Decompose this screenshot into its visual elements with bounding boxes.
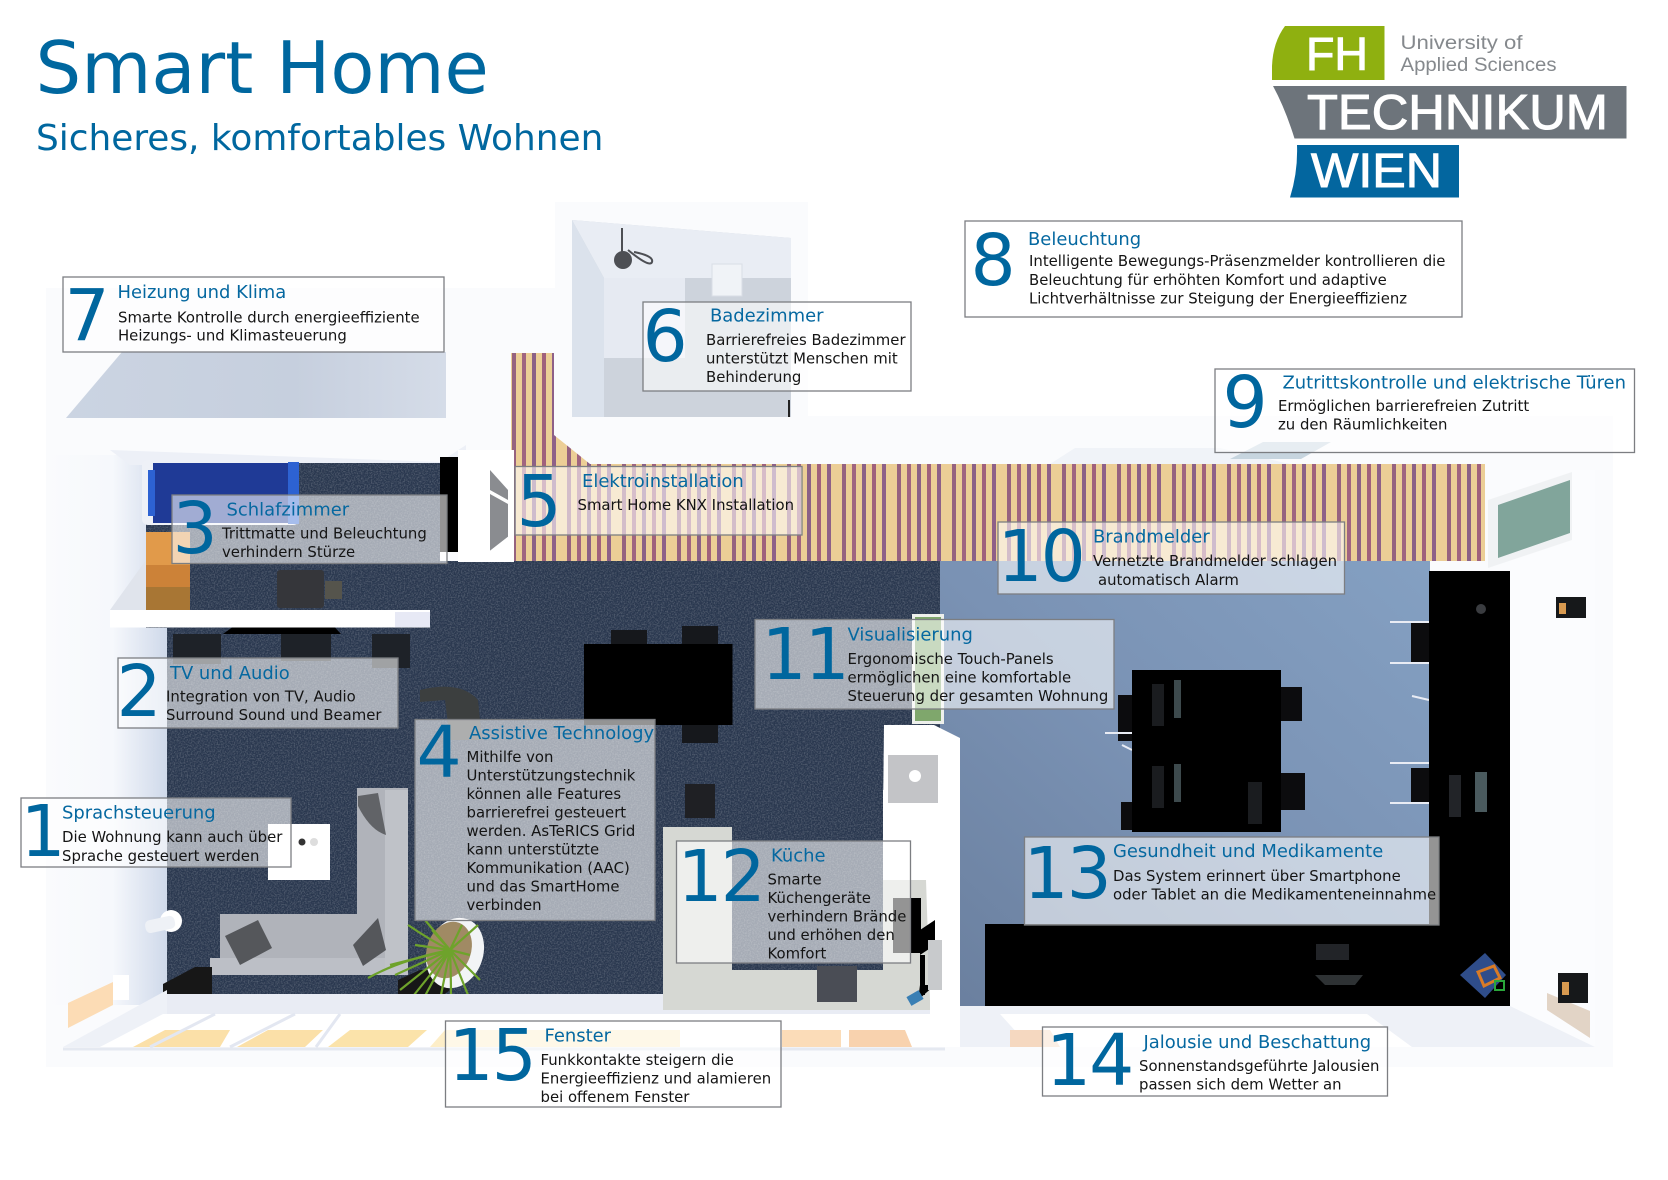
panel 4: Assistive Technology: und das SmartHome (466, 878, 620, 896)
panel 7: Heizung und Klima: Smarte Kontrolle durch energieeffiziente (118, 308, 420, 326)
logo: FH Technikum Wien: Applied Sciences (1400, 55, 1556, 76)
right wall and floor (960, 470, 1595, 1047)
panel 8: Beleuchtung: Intelligente Bewegungs-Präsenzmelder kontrollieren die (1029, 252, 1445, 270)
panel 7: Heizung und Klima: 7 (64, 274, 108, 357)
bathroom (572, 220, 791, 417)
logo: FH Technikum Wien (1272, 26, 1626, 198)
panel 10: Brandmelder: automatisch Alarm (1098, 571, 1239, 589)
kitchen counter (663, 827, 930, 1010)
plant (368, 910, 494, 1040)
panel 6: Badezimmer: Behinderung (706, 368, 801, 386)
office furniture (985, 571, 1510, 1006)
panel 1: Sprachsteuerung: Sprachsteuerung (62, 802, 216, 824)
panel 11: Visualisierung: 11 (762, 613, 848, 696)
panel 15: Fenster: bei offenem Fenster (540, 1088, 690, 1106)
panel 11: Visualisierung (755, 613, 1114, 709)
panel 12: Küche: Smarte (768, 870, 822, 888)
panel 12: Küche: und erhöhen den (768, 926, 895, 944)
panel 4: Assistive Technology: Assistive Technology (469, 723, 655, 744)
panel 13: Gesundheit und Medikamente: Gesundheit und Medikamente (1113, 841, 1383, 862)
left wall glow (46, 455, 167, 1005)
wall lamp (144, 910, 182, 934)
panel 4: Assistive Technology: barrierefrei gesteuert (466, 804, 626, 822)
panel 15: Fenster: 15 (448, 1014, 535, 1097)
panel 6: Badezimmer: unterstützt Menschen mit (706, 350, 898, 368)
panel 12: Küche: 12 (678, 835, 764, 918)
panel 14: Jalousie und Beschattung: Sonnenstandsgeführte Jalousien (1139, 1057, 1379, 1075)
logo: FH Technikum Wien: University of (1400, 33, 1523, 54)
oven unit (888, 755, 938, 803)
panel 11: Visualisierung: ermöglichen eine komfortable (848, 668, 1071, 686)
panel 12: Küche: Küche (771, 846, 826, 866)
panel 5: Elektroinstallation: Elektroinstallation (582, 471, 744, 492)
panel 4: Assistive Technology: werden. AsTeRICS Grid (466, 822, 635, 840)
door 9 (1230, 442, 1331, 459)
carpet (146, 463, 960, 994)
panel 15: Fenster (446, 1014, 781, 1107)
ceiling shade above stripes (1050, 448, 1290, 464)
kitchen wall (883, 725, 960, 1047)
panel 12: Küche: Küchengeräte (768, 889, 871, 907)
right room floor (940, 561, 1430, 1006)
panel 14: Jalousie und Beschattung: Jalousie und Beschattung (1142, 1032, 1371, 1053)
sofa (210, 788, 408, 975)
panel 4: Assistive Technology: Mithilfe von (466, 748, 553, 766)
panel 10: Brandmelder: Brandmelder (1093, 526, 1210, 548)
subtitle: Sicheres, komfortables Wohnen (36, 118, 603, 159)
panel 6: Badezimmer (642, 295, 911, 391)
panel 5: Elektroinstallation (515, 460, 802, 543)
panel 4: Assistive Technology: verbinden (466, 896, 542, 914)
panel 10: Brandmelder: 10 (998, 515, 1084, 598)
bottom floor (63, 975, 945, 1049)
panel 15: Fenster: Funkkontakte steigern die (540, 1051, 734, 1069)
panel 11: Visualisierung: Ergonomische Touch-Panels (848, 650, 1054, 668)
logo: FH Technikum Wien: TECHNIKUM (1307, 86, 1608, 140)
room behind panel 7 (66, 352, 446, 418)
panel 11: Visualisierung: Visualisierung (848, 624, 973, 646)
floor speakers (163, 967, 450, 1013)
panel 7: Heizung und Klima: Heizung und Klima (118, 282, 286, 303)
panel 12: Küche (676, 835, 910, 963)
panel 11: Visualisierung: Steuerung der gesamten Wohnung (848, 687, 1108, 705)
bedroom wall (110, 610, 430, 628)
panel 3: Schlafzimmer: Schlafzimmer (226, 500, 350, 520)
panel 9: Zutrittskontrolle: 9 (1222, 361, 1266, 444)
small stool (685, 784, 715, 818)
panel 12: Küche: verhindern Brände (768, 908, 906, 926)
panel 4: Assistive Technology: 4 (416, 711, 460, 794)
panel 4: Assistive Technology: Kommunikation (AAC) (466, 859, 630, 877)
panel 6: Badezimmer: 6 (642, 295, 686, 378)
panel 10: Brandmelder (998, 515, 1344, 598)
logo: FH Technikum Wien: WIEN (1311, 145, 1442, 198)
panel 4: Assistive Technology: Unterstützungstechnik (466, 766, 636, 784)
desk chair (277, 570, 342, 608)
building footprint (46, 202, 1613, 1067)
panel 14: Jalousie und Beschattung: 14 (1046, 1019, 1132, 1102)
panel 8: Beleuchtung: Beleuchtung für erhöhten Komfort und adaptive (1029, 271, 1387, 289)
panel 7: Heizung und Klima (63, 274, 444, 357)
panel 8: Beleuchtung: 8 (970, 219, 1014, 302)
panel 2: TV und Audio: Surround Sound und Beamer (166, 706, 382, 724)
panel 1: Sprachsteuerung (20, 790, 291, 873)
panel 8: Beleuchtung (965, 219, 1462, 317)
panel 8: Beleuchtung: Beleuchtung (1028, 229, 1141, 250)
bedroom upper wall (110, 445, 466, 465)
panel 13: Gesundheit und Medikamente: oder Tablet an die Medikamenteneinnahme (1113, 886, 1436, 904)
window (1488, 472, 1572, 568)
door frame (440, 450, 514, 562)
panel 9: Zutrittskontrolle: Ermöglichen barrierefreien Zutritt (1278, 397, 1529, 415)
floor plan scene (46, 202, 1613, 1067)
panel 13: Gesundheit und Medikamente: Das System erinnert über Smartphone (1113, 867, 1401, 885)
green wall panel (912, 614, 944, 724)
panel 15: Fenster: Energieeffizienz und alamieren (540, 1070, 771, 1088)
orange cabinet (110, 532, 190, 610)
panel 12: Küche: Komfort (768, 944, 827, 962)
panel 6: Badezimmer: Barrierefreies Badezimmer (706, 331, 906, 349)
panel 3: Schlafzimmer: verhindern Stürze (222, 543, 355, 561)
bed (142, 460, 299, 525)
panel 9: Zutrittskontrolle: zu den Räumlichkeiten (1278, 416, 1447, 434)
kitchen appliance (893, 898, 942, 1006)
wall speakers (1556, 597, 1588, 1003)
panel 5: Elektroinstallation: 5 (516, 460, 560, 543)
striped wall (511, 353, 1485, 561)
panel 13: Gesundheit und Medikamente (1024, 832, 1439, 925)
panel 4: Assistive Technology: kann unterstützte (466, 840, 599, 858)
panel 8: Beleuchtung: Lichtverhältnisse zur Steigung der Energieeffizienz (1029, 290, 1407, 308)
panel 2: TV und Audio (116, 650, 398, 733)
panel 7: Heizung und Klima: Heizungs- und Klimasteuerung (118, 326, 347, 344)
tv and speakers (173, 628, 410, 668)
panel 4: Assistive Technology (415, 711, 655, 920)
panel 10: Brandmelder: Vernetzte Brandmelder schlagen (1093, 552, 1337, 570)
robot kit (1460, 953, 1506, 998)
panel 9: Zutrittskontrolle: Zutrittskontrolle und elektrische Türen (1282, 372, 1626, 394)
panel 1: Sprachsteuerung: Die Wohnung kann auch über (62, 828, 283, 846)
title: Smart Home (36, 26, 489, 110)
panel 3: Schlafzimmer: 3 (172, 487, 216, 570)
panel 1: Sprachsteuerung: Sprache gesteuert werden (62, 847, 259, 865)
panel 3: Schlafzimmer (172, 487, 447, 570)
panel 14: Jalousie und Beschattung (1042, 1019, 1388, 1102)
dining table (584, 626, 732, 743)
panel 14: Jalousie und Beschattung: passen sich dem Wetter an (1139, 1076, 1342, 1094)
panel 6: Badezimmer: Badezimmer (710, 306, 824, 326)
armchair (420, 687, 482, 740)
logo: FH Technikum Wien: FH (1306, 28, 1368, 80)
panel 2: TV und Audio: Integration von TV, Audio (166, 688, 356, 706)
panel 3: Schlafzimmer: Trittmatte und Beleuchtung (221, 524, 427, 542)
panel 4: Assistive Technology: können alle Features (466, 785, 621, 803)
panel 1: Sprachsteuerung: 1 (20, 790, 64, 873)
panel 13: Gesundheit und Medikamente: 13 (1024, 832, 1110, 915)
panel 15: Fenster: Fenster (544, 1026, 612, 1046)
panel 2: TV und Audio: TV und Audio (169, 663, 290, 684)
panel 5: Elektroinstallation: Smart Home KNX Installation (578, 496, 794, 514)
white side table (268, 824, 330, 880)
panel 9: Zutrittskontrolle (1215, 361, 1634, 452)
panel 2: TV und Audio: 2 (116, 650, 160, 733)
